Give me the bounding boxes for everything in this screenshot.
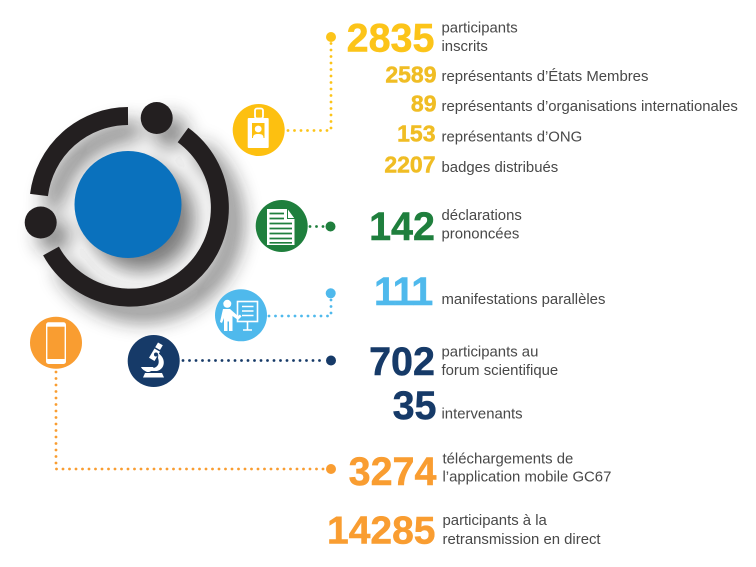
stat: 111 manifestations	[374, 270, 605, 314]
stat: 702 forum: participants au	[442, 345, 538, 361]
logo drop shadow	[38, 116, 233, 312]
stat: 3274 téléchargements	[349, 450, 611, 494]
stat: 153: 153	[397, 121, 436, 147]
icon: document	[256, 200, 308, 252]
stat: 142 déclarations: prononcées	[442, 226, 519, 242]
stat: 2207: 2207	[384, 152, 436, 178]
stat: 14285 retransmission	[327, 509, 601, 552]
stat: 142 déclarations: 142	[369, 205, 435, 249]
ring arc right and bottom	[51, 135, 220, 298]
connector: light blue	[269, 288, 336, 316]
stat: 3274 téléchargements: l’application mobile GC67	[442, 470, 611, 486]
stat: 89	[411, 91, 738, 117]
stat: 3274 téléchargements: téléchargements de	[442, 451, 573, 467]
stat: 2589	[385, 61, 648, 87]
icon: presenter	[215, 289, 267, 341]
stat: 2835 participants inscrits	[347, 16, 518, 60]
stat: 2589: représentants d’États Membres	[442, 68, 648, 85]
stat: 142 déclarations: déclarations	[442, 208, 522, 224]
stat: 142 déclarations	[369, 205, 522, 249]
stat: 111 manifestations: 111	[374, 270, 432, 314]
icon: phone	[30, 317, 82, 369]
stat: 2835 participants inscrits: participants	[442, 20, 518, 36]
connector: green	[310, 222, 336, 232]
stat: 153	[397, 121, 582, 147]
stat: 2207	[384, 152, 558, 178]
stat: 2835 participants inscrits: inscrits	[442, 39, 488, 55]
stat: 14285 retransmission: participants à la	[442, 513, 548, 529]
stat block: participants	[347, 16, 738, 178]
stat: 2835 participants inscrits: 2835	[347, 16, 434, 60]
stat: 35 intervenants: intervenants	[442, 406, 523, 422]
connector: orange	[56, 372, 336, 474]
connector: navy	[183, 356, 336, 366]
small disc left	[25, 206, 57, 238]
small disc top	[141, 102, 173, 134]
stat: 14285 retransmission: 14285	[327, 509, 436, 552]
ring arc upper left	[39, 116, 128, 195]
stat: 702 forum: 702	[369, 340, 435, 384]
stat: 14285 retransmission: retransmission en direct	[442, 532, 601, 548]
stat: 2207: badges distribués	[442, 160, 558, 176]
stat: 35 intervenants	[393, 384, 523, 428]
stat: 702 forum: forum scientifique	[442, 363, 558, 379]
blue disc	[74, 151, 182, 258]
icon: badge	[233, 104, 285, 156]
stat: 153: représentants d’ONG	[442, 130, 582, 146]
stat: 3274 téléchargements: 3274	[349, 450, 437, 494]
connector: yellow	[288, 32, 336, 130]
stat: 702 forum	[369, 340, 558, 384]
stat: 89: 89	[411, 91, 436, 117]
stat: 111 manifestations: manifestations parallèles	[442, 292, 605, 308]
central logo	[25, 102, 233, 312]
stat: 2589: 2589	[385, 61, 436, 87]
stat: 35 intervenants: 35	[393, 384, 436, 428]
stat: 89: représentants d’organisations internationales	[442, 99, 738, 115]
icon: microscope	[128, 335, 180, 387]
